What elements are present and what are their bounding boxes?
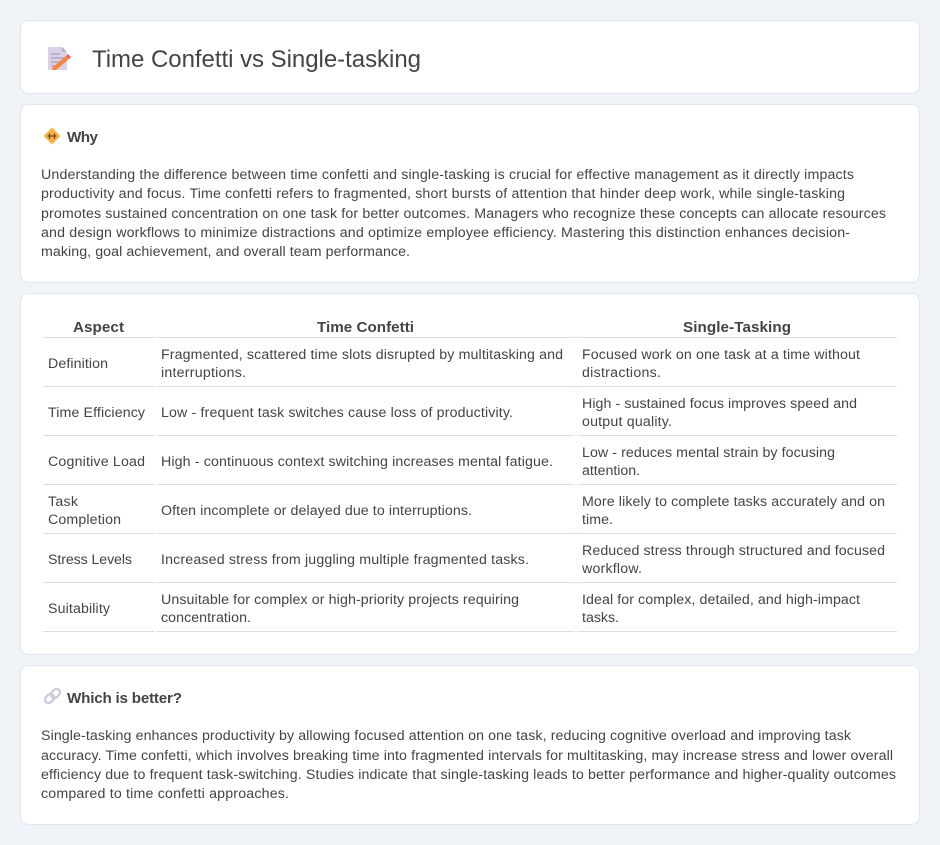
- panel: page header: [20, 20, 920, 94]
- row: definition: interruptions.: [161, 365, 246, 381]
- row: task completion: Completion: [48, 512, 121, 528]
- row: time efficiency: Time Efficiency: [48, 405, 146, 421]
- row: cognitive load: attention.: [582, 463, 640, 479]
- row: suitability: tasks.: [582, 610, 619, 626]
- row: suitability: concentration.: [161, 610, 251, 626]
- table header row: Time Confetti: [317, 319, 414, 336]
- text block: why explanation: productivity and focus. Time confetti refers to fragmented, short bursts of attention that hinder deep work, while single-tasking: [41, 186, 845, 202]
- row: definition: [43, 347, 897, 386]
- row: task completion: More likely to complete tasks accurately and on: [582, 494, 885, 510]
- row: task completion: Task: [48, 494, 79, 510]
- row: time efficiency: Low - frequent task switches cause loss of productivity.: [161, 405, 513, 421]
- icon: warning diamond: [44, 128, 60, 144]
- table header row: Aspect: [73, 319, 124, 336]
- row: cognitive load: High - continuous context switching increases mental fatigue.: [161, 454, 553, 470]
- icon: chain link: [43, 687, 62, 705]
- row: time efficiency: output quality.: [582, 414, 672, 430]
- row: time efficiency: High - sustained focus improves speed and: [582, 396, 857, 412]
- row: definition: Fragmented, scattered time slots disrupted by multitasking and: [161, 347, 563, 363]
- table header row: Single-Tasking: [683, 319, 791, 336]
- row: stress levels: workflow.: [581, 561, 642, 577]
- text block: verdict: Single-tasking enhances productivity by allowing focused attention on one task, reducing cognitive overload and improving task: [41, 728, 852, 744]
- row: time efficiency: [43, 396, 897, 436]
- text block: why explanation: [41, 167, 886, 260]
- heading: which is better: Which is better?: [67, 690, 182, 707]
- row: suitability: [43, 592, 897, 632]
- row: task completion: [43, 494, 897, 534]
- text block: why explanation: Understanding the difference between time confetti and single-tasking is crucial for effective management as it directly impacts: [41, 167, 854, 183]
- row: suitability: Unsuitable for complex or high-priority projects requiring: [161, 592, 519, 608]
- row: cognitive load: Low - reduces mental strain by focusing: [582, 445, 835, 461]
- row: task completion: Often incomplete or delayed due to interruptions.: [161, 503, 472, 519]
- table header row: [43, 319, 897, 338]
- row: stress levels: Stress Levels: [48, 552, 132, 568]
- text block: why explanation: promotes sustained concentration on one task for better outcomes. Managers who recognize these concepts can allocate resources: [41, 206, 886, 222]
- row: cognitive load: Cognitive Load: [48, 454, 145, 470]
- row: definition: distractions.: [582, 365, 661, 381]
- row: stress levels: Increased stress from juggling multiple fragmented tasks.: [161, 552, 529, 568]
- row: definition: Focused work on one task at a time without: [582, 347, 860, 363]
- text block: verdict: compared to time confetti approaches.: [41, 786, 289, 802]
- text block: verdict: accuracy. Time confetti, which involves breaking time into fragmented intervals for multitasking, may increase stress and lower overall: [41, 748, 893, 764]
- panel: comparison table: [20, 294, 920, 654]
- text block: verdict: [41, 728, 896, 802]
- row: suitability: Suitability: [48, 601, 111, 617]
- row: stress levels: [43, 543, 897, 582]
- icon: memo and pencil: [48, 47, 71, 70]
- row: definition: Definition: [48, 356, 108, 372]
- row: task completion: time.: [582, 512, 613, 528]
- row: suitability: Ideal for complex, detailed, and high-impact: [582, 592, 860, 608]
- text block: why explanation: and design workflows to minimize distractions and optimize employee efficiency. Mastering this distinction enhances decision-: [41, 225, 850, 241]
- heading: why: Why: [67, 129, 99, 146]
- row: cognitive load: [43, 445, 897, 484]
- row: stress levels: Reduced stress through structured and focused: [582, 543, 885, 559]
- panel: why: [20, 104, 920, 282]
- title: Time Confetti vs Single-tasking: [92, 46, 421, 73]
- text block: why explanation: making, goal achievement, and overall team performance.: [41, 244, 410, 260]
- text block: verdict: efficiency due to frequent task-switching. Studies indicate that single-tasking leads to better performance and higher-quality outcomes: [41, 767, 896, 783]
- panel: which is better: [20, 666, 920, 824]
